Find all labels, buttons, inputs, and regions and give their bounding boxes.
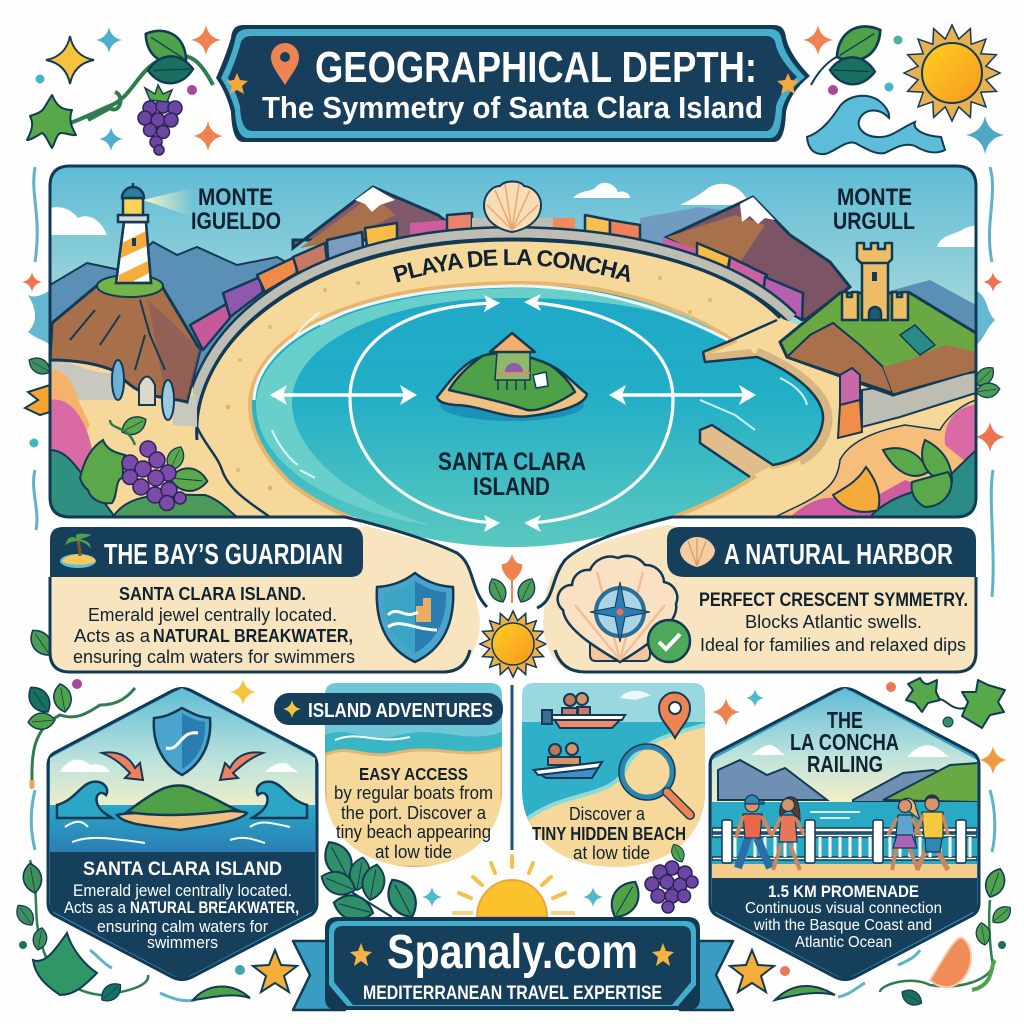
body text: ensuring calm waters for swimmers <box>73 646 355 667</box>
mountains <box>718 760 978 802</box>
text: 1.5 km promenade: Atlantic Ocean <box>795 934 892 951</box>
heading: LA CONCHA <box>790 729 899 755</box>
sea wall <box>192 226 797 410</box>
footer leaves, grapes and sparkles <box>318 837 698 925</box>
body text: Discover a <box>569 804 646 824</box>
map label: santa clara island: SANTA CLARA <box>438 448 586 476</box>
map label: santa clara island: ISLAND <box>473 473 550 501</box>
icon: sun <box>480 611 546 677</box>
body text: at low tide <box>573 843 650 863</box>
body text: at low tide <box>375 842 452 862</box>
map label: monte igueldo: IGUELDO <box>191 208 281 235</box>
bottom-right foliage <box>775 400 976 517</box>
lighthouse <box>116 183 193 283</box>
map label: monte urgull <box>833 184 915 235</box>
top-left decoration: vine, sparkles and grapes <box>27 22 223 155</box>
tagline: MEDITERRANEAN TRAVEL EXPERTISE <box>363 983 662 1004</box>
icon: shell flourish <box>930 938 971 987</box>
heading: RAILING <box>807 751 883 777</box>
clouds <box>752 745 950 757</box>
walker one <box>736 795 772 868</box>
text: santa clara island <box>64 859 299 952</box>
icon: wave <box>807 96 945 154</box>
lower-right foliage <box>712 678 1015 1009</box>
body text: Blocks Atlantic swells. <box>745 611 922 632</box>
icon: shell with compass and check badge <box>558 556 690 662</box>
panel: the bay's guardian <box>50 517 487 672</box>
map label: monte igueldo <box>191 184 281 235</box>
text: santa clara island: SANTA CLARA ISLAND <box>83 859 282 880</box>
castle <box>842 243 908 320</box>
icon: shield with wave and breakwater <box>377 573 453 662</box>
icon: map pin <box>659 692 690 738</box>
walker two <box>772 797 804 870</box>
walkers <box>736 795 948 870</box>
card: easy access <box>325 683 502 867</box>
text: 1.5 km promenade <box>745 882 942 951</box>
hexagon panel: the la concha railing <box>710 688 979 983</box>
icon: boat one <box>542 693 625 728</box>
side decoration: left <box>22 167 57 660</box>
divider <box>510 685 514 850</box>
map grapes <box>122 441 186 510</box>
walker four <box>915 795 948 870</box>
santa clara island <box>437 333 587 421</box>
body text: by regular boats from <box>334 783 493 803</box>
monte igueldo hill <box>50 275 200 402</box>
surfboards <box>112 360 174 420</box>
banner stars <box>350 943 674 966</box>
title line one: GEOGRAPHICAL DEPTH: <box>315 43 757 92</box>
map label: monte urgull: URGULL <box>833 208 915 235</box>
text: santa clara island: Acts as a <box>64 899 127 917</box>
heading pill: island adventures: ISLAND ADVENTURES <box>308 699 493 722</box>
icon: shield <box>154 708 210 775</box>
mooring post <box>838 368 862 438</box>
heading bar <box>667 527 976 577</box>
mountain behind the promenade, left <box>293 187 470 248</box>
icon: gold star <box>253 950 297 992</box>
sand specks <box>226 276 712 490</box>
shell ornament <box>484 182 541 232</box>
heading <box>790 707 899 777</box>
heading: a natural harbor: A NATURAL HARBOR <box>724 539 953 571</box>
text: 1.5 km promenade: 1.5 KM PROMENADE <box>768 882 919 901</box>
body text: TINY HIDDEN BEACH <box>532 824 686 844</box>
sand <box>50 240 976 517</box>
footer banner <box>293 917 733 1010</box>
heading: the bay's guardian: THE BAY’S GUARDIAN <box>104 539 343 571</box>
text: santa clara island: Emerald jewel centrally located. <box>73 882 292 900</box>
brand name: Spanaly.com <box>387 926 638 979</box>
icon: sun <box>904 25 1000 121</box>
hexagon panel: santa clara island <box>48 688 317 982</box>
text: 1.5 km promenade: Continuous visual connection <box>745 900 942 917</box>
footer sunrise <box>452 856 575 917</box>
text: santa clara island: ensuring calm waters for <box>97 918 268 936</box>
icon: scallop shell small <box>680 537 715 567</box>
map label: monte urgull: MONTE <box>837 184 912 211</box>
waves <box>57 782 307 818</box>
panel: a natural harbor <box>537 517 976 672</box>
icon: gold star <box>730 950 774 992</box>
body text: NATURAL BREAKWATER, <box>153 625 353 646</box>
body text <box>699 590 968 655</box>
railing <box>712 820 977 863</box>
orbit arcs and arrows <box>270 294 756 532</box>
heading: THE <box>827 707 863 733</box>
heading pill: island adventures <box>274 693 503 725</box>
body text: Emerald jewel centrally located. <box>88 604 337 625</box>
bay water <box>252 285 829 547</box>
map label: monte igueldo: MONTE <box>198 184 273 211</box>
grey road <box>50 358 976 427</box>
bottom-left foliage <box>50 370 237 517</box>
icon: incoming wave arrows <box>102 752 263 780</box>
top-right decoration: sun, wave, leaves and sparkles <box>803 17 1004 154</box>
heading bar <box>50 527 363 577</box>
clouds <box>60 760 298 772</box>
icon: palm island <box>60 534 96 568</box>
map label: santa clara island <box>438 448 586 501</box>
body text: tiny beach appearing <box>336 822 491 842</box>
panel: bay map <box>48 164 978 547</box>
promenade buildings <box>190 213 803 350</box>
lower-left foliage <box>12 679 297 1006</box>
card: tiny hidden beach <box>522 683 705 867</box>
title banner <box>216 25 810 142</box>
text: santa clara island: NATURAL BREAKWATER, <box>130 899 299 917</box>
background mountains <box>52 207 974 378</box>
body text <box>334 764 493 862</box>
body text: PERFECT CRESCENT SYMMETRY. <box>699 590 968 611</box>
text: 1.5 km promenade: with the Basque Coast and <box>753 917 932 934</box>
body text: EASY ACCESS <box>359 764 468 784</box>
island <box>117 785 247 830</box>
monte urgull hill <box>780 293 976 395</box>
mountain behind the promenade, right <box>667 197 850 320</box>
ribbon tails <box>293 941 733 1010</box>
walker three <box>888 798 921 870</box>
title line two: The Symmetry of Santa Clara Island <box>262 90 763 125</box>
body text: Ideal for families and relaxed dips <box>700 634 966 655</box>
icon: boat two <box>534 743 602 778</box>
side decoration: right <box>971 167 1005 597</box>
text: santa clara island: swimmers <box>147 934 218 952</box>
icon: location pin <box>271 43 299 85</box>
body text <box>532 804 686 863</box>
clouds <box>50 183 976 247</box>
body text <box>73 584 355 667</box>
body text: Acts as a <box>74 625 151 646</box>
piers <box>700 320 829 477</box>
icon: magnifying glass <box>619 744 690 815</box>
centre ornament: flower, leaves and sun <box>480 557 546 677</box>
map label: playa de la concha: PLAYA DE LA CONCHA <box>393 249 630 282</box>
body text: SANTA CLARA ISLAND. <box>119 584 306 604</box>
banner stars <box>226 73 799 94</box>
body text: the port. Discover a <box>341 803 487 823</box>
